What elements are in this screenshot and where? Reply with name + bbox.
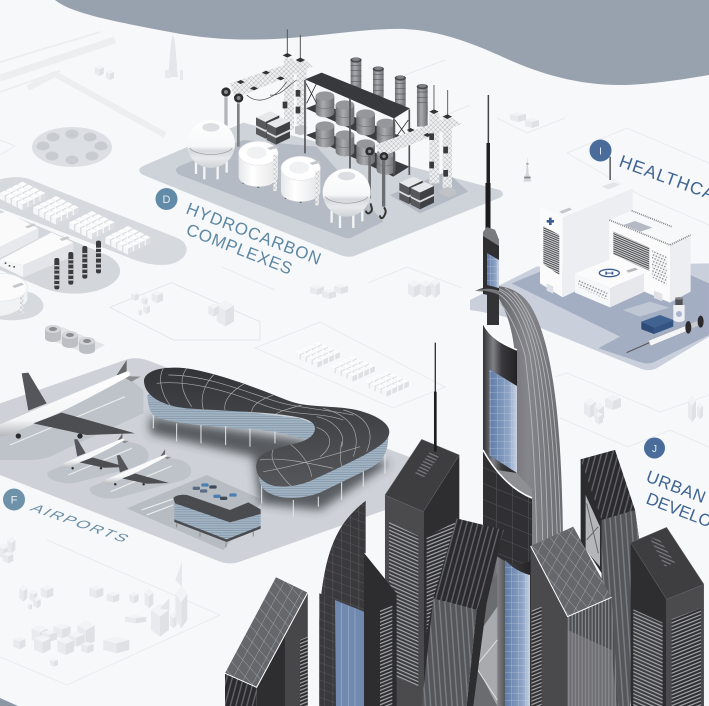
tall hospital block	[540, 180, 633, 297]
badge F: F	[11, 494, 18, 506]
badge I: I	[599, 146, 602, 158]
title line 1: URBAN	[644, 467, 708, 507]
sphere tank 2	[323, 169, 371, 228]
heading: airports	[3, 488, 132, 545]
right slab	[390, 172, 468, 213]
spire	[486, 95, 490, 230]
tower lower left	[225, 577, 308, 706]
terminal columns	[153, 415, 385, 517]
mid shaft	[483, 323, 517, 480]
small faint tower	[165, 35, 183, 80]
terminal wing facade	[147, 393, 317, 440]
cylinder tank 1	[239, 141, 279, 188]
cylinder tank 1 ladder	[273, 155, 277, 191]
factory platform	[0, 210, 120, 294]
white storage blocks	[0, 182, 151, 255]
low clinic block	[575, 259, 644, 307]
medicine bottle	[673, 297, 685, 322]
tank platform	[0, 283, 43, 320]
crane 1	[221, 29, 313, 147]
tower rear right	[581, 450, 639, 706]
inner slab	[176, 140, 383, 238]
outer platform	[470, 263, 709, 370]
panel: central skyscraper	[475, 95, 563, 706]
faint building groups center	[310, 112, 539, 299]
panel: airports	[0, 358, 413, 563]
terminal roof	[144, 368, 389, 487]
crates 2	[399, 177, 434, 209]
tower B twisted	[422, 518, 504, 706]
platform	[0, 358, 413, 563]
big airliner	[0, 360, 141, 439]
panel: left industrial zone	[0, 177, 260, 340]
terminal second wing facade	[258, 435, 388, 498]
panel: healthcare	[470, 157, 709, 370]
tower G right front	[631, 527, 704, 706]
badge I	[590, 140, 612, 162]
sphere tank 1	[187, 120, 235, 179]
factory halls	[0, 212, 73, 277]
chimneys	[54, 241, 101, 289]
roundabout plaza	[32, 127, 112, 167]
tower curved left	[319, 501, 397, 706]
roads top left	[0, 32, 165, 135]
cylinder tank 2	[281, 156, 321, 203]
antenna	[609, 157, 611, 180]
heading: urban development	[644, 438, 709, 553]
chimney stacks	[350, 57, 428, 127]
platform	[139, 123, 503, 257]
title line 2: COMPLEXES	[184, 220, 295, 278]
faint parcel buildings	[110, 283, 260, 340]
runway marks	[10, 397, 175, 515]
badge D: D	[163, 194, 171, 206]
faint buildings right	[584, 395, 703, 424]
inner platform	[512, 272, 709, 364]
second hospital block	[609, 211, 691, 303]
glass behind tower B	[468, 573, 497, 706]
antenna on tower A	[434, 343, 437, 452]
shelf rack	[305, 73, 410, 177]
apron big	[0, 377, 143, 460]
car park slab	[127, 475, 263, 550]
medicine box	[641, 315, 673, 334]
heading: hydrocarbon complexes	[156, 188, 324, 278]
faint buildings top left	[95, 65, 114, 80]
sail arch	[475, 286, 563, 560]
concrete drums	[45, 325, 105, 354]
apron small 1	[47, 442, 149, 483]
badge D	[156, 188, 178, 210]
faint comb buildings	[295, 342, 409, 397]
title line 1: HYDROCARBON	[184, 199, 324, 269]
tower A	[385, 439, 459, 706]
terminal shadow	[150, 417, 390, 510]
small tower	[523, 157, 531, 182]
small airliner 1	[62, 433, 129, 469]
title: AIRPORTS	[26, 503, 132, 545]
gate building	[173, 495, 261, 547]
storage yard platform	[0, 177, 187, 265]
crane hooks	[366, 203, 386, 218]
badge J: J	[652, 444, 657, 455]
drum	[483, 450, 532, 706]
upper shaft	[475, 227, 499, 325]
faint small buildings bottom left	[0, 537, 187, 667]
panel: hydrocarbon complexes	[139, 29, 503, 257]
round oil tank	[0, 273, 27, 316]
small airliner 2	[105, 449, 172, 485]
water: river top	[55, 0, 709, 85]
crates 1	[256, 111, 290, 145]
crane 2	[365, 85, 462, 207]
cylinder tank 2 ladder	[315, 171, 319, 205]
water: bottom left corner	[0, 698, 18, 706]
heading: healthcare	[590, 140, 709, 213]
light pad	[623, 302, 669, 317]
tower E slab	[531, 527, 618, 706]
cars	[193, 483, 237, 500]
syringe	[627, 316, 704, 353]
apron small 2	[90, 458, 191, 499]
panel: surrounding towers	[225, 343, 704, 706]
